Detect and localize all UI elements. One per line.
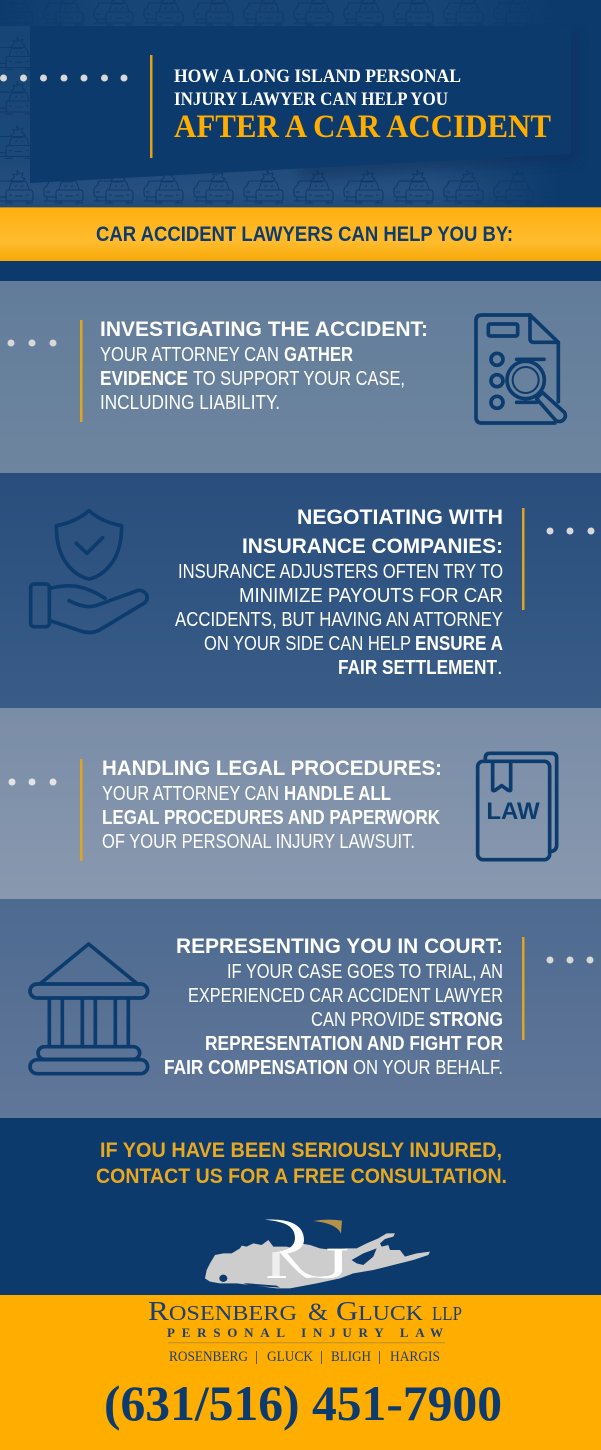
icon: courthouse (30, 944, 148, 1074)
firm name: GLUCK (336, 1296, 423, 1326)
text block: INVESTIGATING THE ACCIDENT: (100, 317, 428, 341)
dots (8, 340, 56, 346)
text block: ON YOUR BEHALF. (353, 1057, 503, 1079)
text block: ENSURE A (415, 633, 503, 655)
footer call to action: CONTACT US FOR A FREE CONSULTATION. (96, 1164, 507, 1188)
gold swoosh (313, 1220, 342, 1234)
partner names: HARGIS (390, 1349, 440, 1365)
tagline: PERSONAL INJURY LAW (167, 1325, 443, 1340)
gold banner: CAR ACCIDENT LAWYERS CAN HELP YOU BY: (96, 222, 513, 246)
header background with car pattern (0, 0, 601, 207)
logo mark (205, 1219, 430, 1288)
divider (80, 320, 82, 422)
text block: REPRESENTATION AND FIGHT FOR (205, 1033, 503, 1055)
text block (175, 505, 503, 679)
text block: OF YOUR PERSONAL INJURY LAWSUIT. (102, 831, 415, 853)
divider (80, 759, 82, 861)
divider (522, 937, 524, 1040)
text block: . (497, 657, 503, 679)
text block: REPRESENTING YOU IN COURT: (176, 934, 503, 958)
text block: IF YOUR CASE GOES TO TRIAL, AN (227, 961, 503, 983)
text block: YOUR ATTORNEY CAN (100, 344, 279, 366)
text block: ACCIDENTS, BUT HAVING AN ATTORNEY (175, 609, 503, 631)
gold banner (0, 207, 601, 261)
title panel (0, 26, 579, 183)
text block: INSURANCE COMPANIES: (242, 534, 503, 558)
text block: EXPERIENCED CAR ACCIDENT LAWYER (188, 985, 503, 1007)
divider (522, 508, 524, 610)
phone number: (631/516) 451-7900 (104, 1375, 502, 1431)
panel: court (0, 899, 601, 1118)
title: AFTER A CAR ACCIDENT (174, 109, 551, 145)
text block: LEGAL PROCEDURES AND PAPERWORK (102, 807, 440, 829)
yellow footer (0, 1295, 601, 1450)
island map (205, 1233, 430, 1288)
title divider (150, 55, 152, 158)
dots (8, 778, 56, 786)
footer call to action: IF YOU HAVE BEEN SERIOUSLY INJURED, (100, 1138, 502, 1162)
firm name: LLP (432, 1303, 462, 1325)
text block: INSURANCE ADJUSTERS OFTEN TRY TO (178, 561, 503, 583)
title: INJURY LAWYER CAN HELP YOU (174, 89, 448, 110)
text block: GATHER (284, 344, 353, 366)
panel: legal procedures (0, 708, 601, 899)
text block: TO SUPPORT YOUR CASE, (193, 368, 405, 390)
text block: HANDLE ALL (284, 783, 391, 805)
RG monogram (265, 1219, 347, 1278)
text block (100, 317, 428, 414)
panel: investigating (0, 281, 601, 473)
partner names: ROSENBERG (169, 1349, 248, 1365)
text block: EVIDENCE (100, 368, 188, 390)
footer call to action (0, 1118, 601, 1295)
text block: FAIR SETTLEMENT (338, 657, 497, 679)
text block: CAN PROVIDE (311, 1009, 425, 1031)
text block: STRONG (429, 1009, 503, 1031)
title (174, 66, 551, 145)
title dots (0, 74, 128, 82)
icon: document with magnifier (476, 315, 565, 423)
partner names: | (378, 1349, 381, 1365)
dots (546, 528, 594, 534)
text block: ON YOUR SIDE CAN HELP (204, 633, 411, 655)
text block: MINIMIZE PAYOUTS FOR CAR (239, 585, 503, 607)
icon: law book: LAW (486, 798, 540, 825)
icon: hand with shield (31, 511, 147, 633)
partner names: | (255, 1349, 258, 1365)
title: HOW A LONG ISLAND PERSONAL (174, 66, 461, 87)
text block: FAIR COMPENSATION (164, 1057, 348, 1079)
text block: YOUR ATTORNEY CAN (102, 783, 279, 805)
partner names: GLUCK (267, 1349, 313, 1365)
text block: NEGOTIATING WITH (297, 505, 503, 529)
text block (164, 934, 503, 1079)
text block: INCLUDING LIABILITY. (100, 392, 280, 414)
text block: HANDLING LEGAL PROCEDURES: (102, 756, 442, 780)
firm name (148, 1296, 462, 1326)
partner names: | (320, 1349, 323, 1365)
firm name: ROSENBERG (148, 1296, 297, 1326)
partner names: BLIGH (331, 1349, 371, 1365)
text block (102, 756, 442, 853)
partner names (169, 1349, 440, 1365)
panel: negotiating (0, 473, 601, 708)
firm name: & (308, 1299, 328, 1326)
dots (546, 956, 594, 964)
icon: law book (478, 753, 557, 860)
